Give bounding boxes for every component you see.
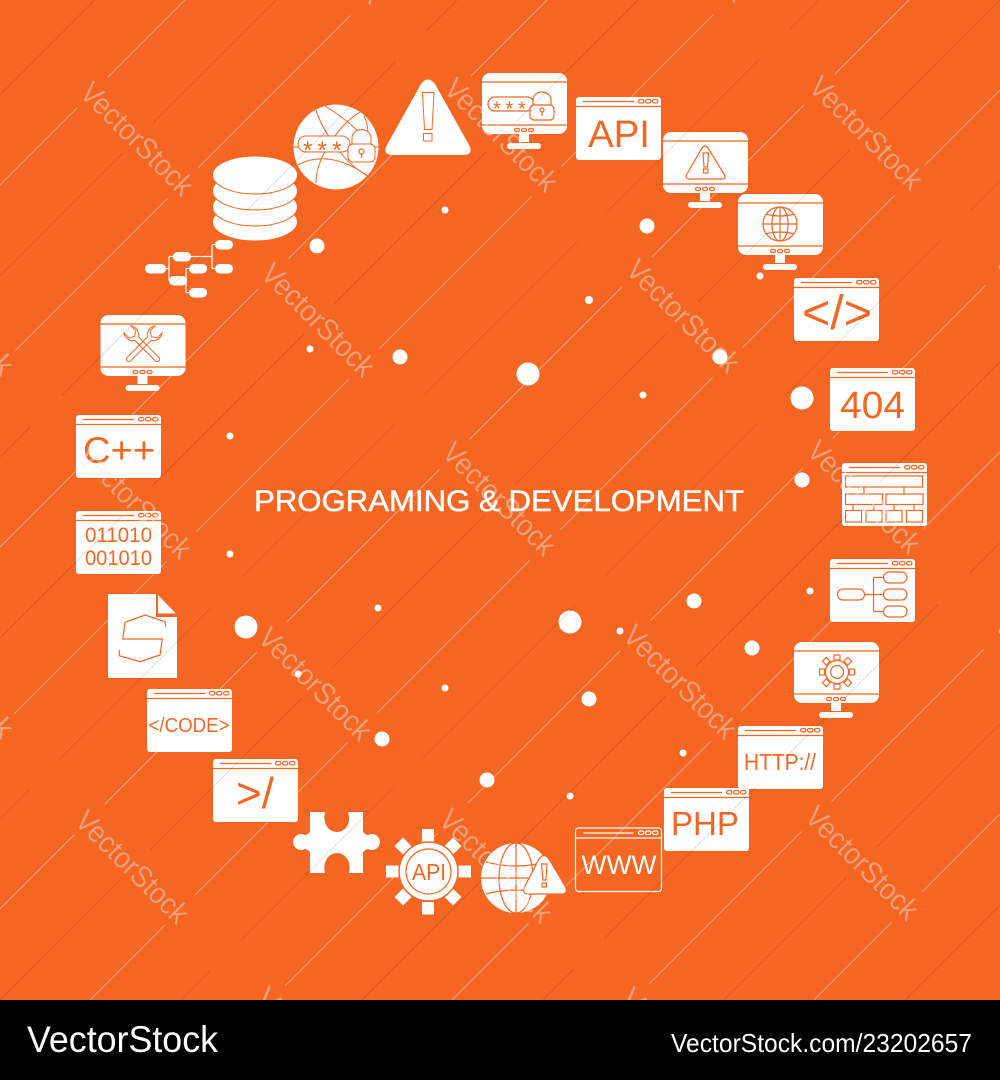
watermarks: Ve [249, 982, 297, 1030]
icon: 404 browser [830, 368, 915, 431]
footer bar [0, 1000, 1000, 1080]
icon: binary browser: 001010 [85, 547, 152, 570]
icon: globe with password lock [294, 104, 379, 190]
icon: monitor with globe [738, 194, 823, 270]
watermarks: VectorStock [254, 257, 382, 384]
watermarks: VectorStock [616, 619, 744, 746]
watermarks: VectorStock [432, 803, 560, 930]
icon: PHP browser [664, 788, 749, 851]
icon: binary browser: 011010 [85, 524, 152, 547]
icon: API gear [386, 829, 471, 914]
icon: code tag browser [794, 278, 879, 341]
icon: monitor with tools [100, 315, 186, 391]
icon: flow diagram browser [830, 559, 915, 622]
footer logo text: VectorStock [27, 1019, 218, 1060]
icon: C++ browser [76, 415, 161, 478]
watermarks: VectorStock [802, 70, 930, 197]
icon: WWW outlined browser [576, 828, 662, 892]
icon: binary browser [76, 511, 161, 574]
icon: terminal prompt browser: >/ [236, 769, 275, 818]
icon: code tag browser: </> [802, 287, 872, 340]
icon: 404 browser: 404 [840, 385, 905, 427]
watermarks: VectorStock [800, 434, 928, 561]
icon: API browser [576, 97, 661, 160]
icon: HTTP browser: HTTP:// [744, 749, 817, 775]
icon: globe with password lock: *** [303, 137, 347, 164]
icon: monitor with alert [663, 132, 748, 208]
icon: puzzle piece [293, 812, 380, 873]
watermarks: VectorStock [71, 439, 199, 566]
icon: CODE browser [147, 689, 232, 752]
watermarks: VectorStock [68, 804, 196, 931]
watermarks: VectorStock [251, 621, 379, 748]
icon: warning triangle [385, 80, 471, 155]
icon: database [212, 156, 298, 241]
icon: C++ browser: C++ [83, 430, 155, 471]
icon: monitor with gear [794, 642, 879, 718]
icon: HTTP browser [738, 726, 823, 789]
watermarks: VectorStock [435, 436, 563, 563]
icon: monitor with password [482, 73, 567, 149]
icon: terminal prompt browser [213, 759, 298, 822]
icon: API gear: API [412, 859, 446, 885]
title: PROGRAMING & DEVELOPMENT [254, 485, 744, 518]
icon: globe with warning [481, 843, 566, 913]
icon: API browser: API [588, 114, 650, 156]
watermarks: VectorStock [798, 800, 926, 927]
icon: S file [108, 594, 177, 678]
icon: PHP browser: PHP [671, 805, 739, 842]
scattered dots [226, 206, 814, 800]
icon: layout browser [842, 463, 927, 526]
footer image id: VectorStock.com/23202657 [671, 1028, 972, 1058]
icon: flowchart tree [145, 240, 233, 298]
watermarks: VectorStock [437, 72, 565, 199]
watermarks: Ve [614, 982, 662, 1030]
icon: monitor with password: *** [493, 98, 530, 120]
watermarks: VectorStock [73, 76, 201, 203]
watermarks: VectorStock [619, 253, 747, 380]
icon: WWW outlined browser: WWW [582, 850, 657, 880]
icon: CODE browser: </CODE> [148, 715, 230, 737]
